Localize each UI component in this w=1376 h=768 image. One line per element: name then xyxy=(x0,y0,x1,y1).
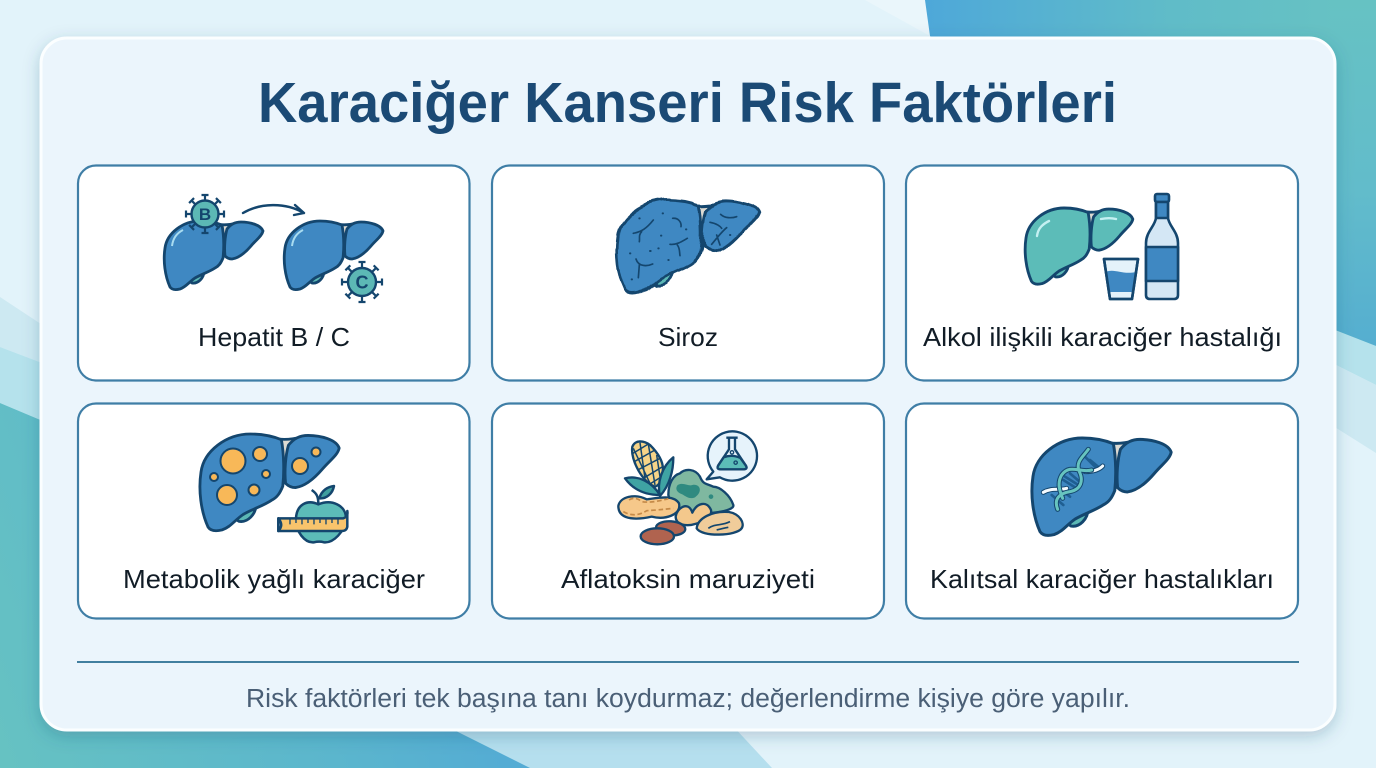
label: Aflatoksin maruziyeti xyxy=(561,564,815,594)
card: Siroz xyxy=(492,166,884,380)
divider xyxy=(77,661,1299,663)
icon: liver with virus C xyxy=(284,221,383,302)
label: Siroz xyxy=(658,322,718,352)
icon: liver with virus B: B xyxy=(199,205,211,224)
card: Kalıtsal xyxy=(906,404,1298,618)
title: Karaciğer Kanseri Risk Faktörleri xyxy=(258,71,1117,135)
card: Hepatit B / C xyxy=(78,166,470,380)
footer note: Risk faktörleri tek başına tanı koydurmaz; değerlendirme kişiye göre yapılır. xyxy=(246,685,1130,713)
icon: teal liver xyxy=(1025,208,1133,284)
icon: fatty liver xyxy=(200,434,339,531)
label: Kalıtsal karaciğer hastalıkları xyxy=(930,564,1274,594)
label: Metabolik yağlı karaciğer xyxy=(123,564,425,594)
label: Alkol ilişkili karaciğer hastalığı xyxy=(923,322,1282,352)
icon: apple and measuring tape xyxy=(278,486,347,542)
icon: food pile with flask bubble xyxy=(618,431,757,544)
icon: liver with virus C: C xyxy=(356,272,368,292)
icon: liver with DNA xyxy=(1032,438,1171,535)
icon: liver with virus B xyxy=(164,195,263,290)
label: Hepatit B / C xyxy=(198,322,350,352)
arrow xyxy=(243,205,304,215)
card: Aflatoksin xyxy=(492,404,884,618)
card: Metabolik xyxy=(78,404,470,618)
icon: bottle xyxy=(1146,194,1178,299)
card: Alkol xyxy=(906,166,1298,380)
icon: glass xyxy=(1104,259,1138,299)
icon: cirrhotic liver xyxy=(617,200,757,294)
